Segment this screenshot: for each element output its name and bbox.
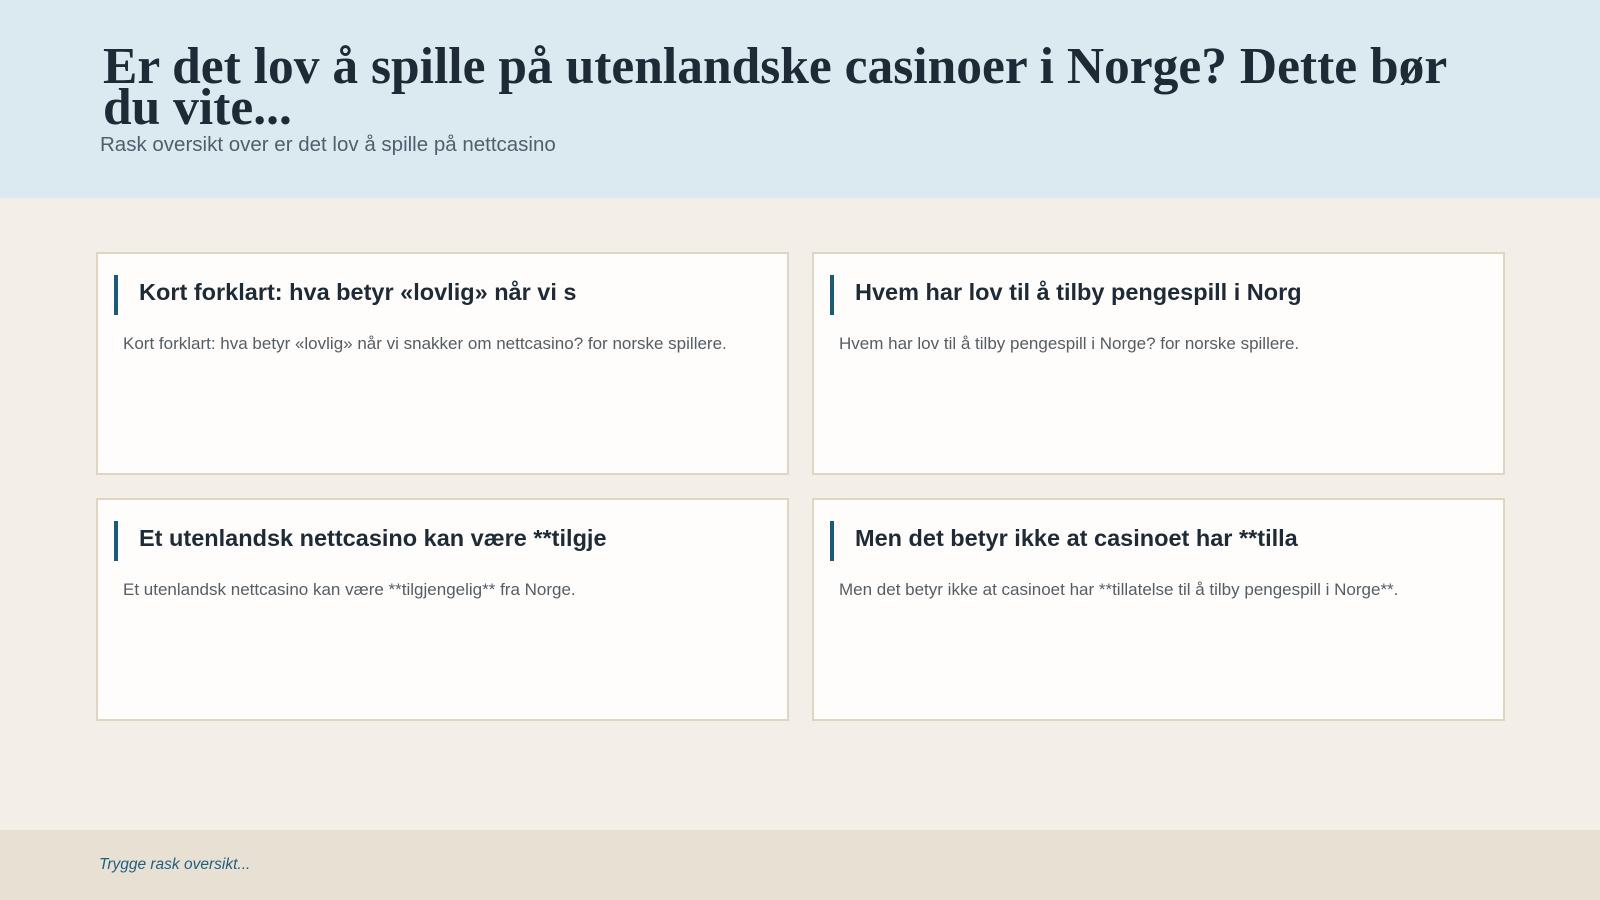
panel: card 3	[96, 498, 789, 721]
panel: card 4	[812, 498, 1505, 721]
card text: Hvem har lov til å tilby pengespill i Norge? for norske spillere.	[839, 334, 1299, 353]
header	[0, 0, 1600, 198]
card text: Et utenlandsk nettcasino kan være **tilgjengelig** fra Norge.	[123, 580, 576, 599]
panel: card 2	[812, 252, 1505, 475]
card heading: Kort forklart: hva betyr «lovlig» når vi s	[139, 279, 576, 305]
footer text: Trygge rask oversikt...	[99, 856, 250, 873]
card heading	[114, 275, 576, 315]
footer	[0, 830, 1600, 900]
card heading	[830, 275, 1302, 315]
title: du vite...	[103, 79, 292, 136]
panel: card 1	[96, 252, 789, 475]
card heading: Men det betyr ikke at casinoet har **tilla	[855, 525, 1298, 551]
card heading: Et utenlandsk nettcasino kan være **tilgje	[139, 525, 607, 551]
card heading	[114, 521, 607, 561]
card text: Kort forklart: hva betyr «lovlig» når vi snakker om nettcasino? for norske spillere.	[123, 334, 727, 353]
subtitle: Rask oversikt over er det lov å spille på nettcasino	[100, 133, 556, 156]
card heading: Hvem har lov til å tilby pengespill i Norg	[855, 279, 1302, 305]
card text: Men det betyr ikke at casinoet har **tillatelse til å tilby pengespill i Norge**.	[839, 580, 1398, 599]
card heading	[830, 521, 1298, 561]
title: Er det lov å spille på utenlandske casinoer i Norge? Dette bør	[103, 38, 1447, 95]
title	[103, 38, 1447, 136]
